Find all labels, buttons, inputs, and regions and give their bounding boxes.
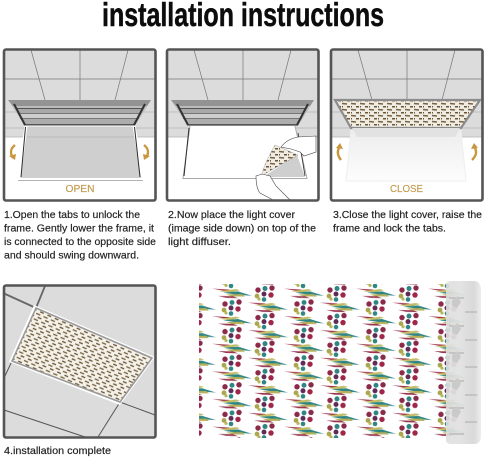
text: step 2 caption: light diffuser. <box>168 237 231 248</box>
label: close: CLOSE <box>390 183 423 195</box>
text: step 3 caption <box>333 210 482 234</box>
text: step 2 caption: (image side down) on top of the <box>168 224 316 234</box>
text: step 1 caption: is connected to the opposite side <box>4 237 156 248</box>
icon: right arrow up <box>472 146 476 160</box>
text: step 3 caption: frame and lock the tabs. <box>333 224 446 234</box>
text: step 1 caption: 1.Open the tabs to unlock the <box>4 210 140 221</box>
product: roll end <box>446 281 481 444</box>
hanging door <box>19 126 143 179</box>
icon: upper hand <box>281 136 316 156</box>
patterned panel <box>335 100 480 128</box>
text: step 1 caption <box>4 210 156 262</box>
icon: right arrow down <box>144 145 148 158</box>
icon: right arrowhead <box>471 143 478 149</box>
icon: right arrowhead <box>143 154 150 160</box>
icon: left arrow up <box>338 146 341 160</box>
icon: left arrowhead <box>9 154 16 160</box>
label: open: OPEN <box>66 183 94 195</box>
peeled cover sheet <box>261 145 298 176</box>
exposed diffuser corner <box>263 155 305 177</box>
text: step 3 caption: 3.Close the light cover, raise the <box>333 210 482 221</box>
patterned panel <box>12 308 152 402</box>
product: pattern strip <box>199 284 469 438</box>
icon: lower hand <box>256 174 290 200</box>
text: step 2 caption: 2.Now place the light cover <box>168 210 296 221</box>
text: step 2 caption <box>168 210 316 248</box>
text: step 1 caption: frame. Gently lower the frame, it <box>4 224 154 234</box>
text: step 4 caption: 4.installation complete <box>4 446 111 457</box>
panel: step 3 close <box>331 50 482 200</box>
panel: step 4 installed <box>3 286 156 438</box>
faint open door <box>346 130 466 181</box>
icon: left arrowhead <box>336 143 343 149</box>
text: step 1 caption: and should swing downward. <box>4 250 139 262</box>
icon: left arrow down <box>11 145 15 158</box>
panel: step 2 place cover <box>167 50 318 200</box>
panel: step 1 open <box>4 50 156 200</box>
glow <box>9 305 155 405</box>
